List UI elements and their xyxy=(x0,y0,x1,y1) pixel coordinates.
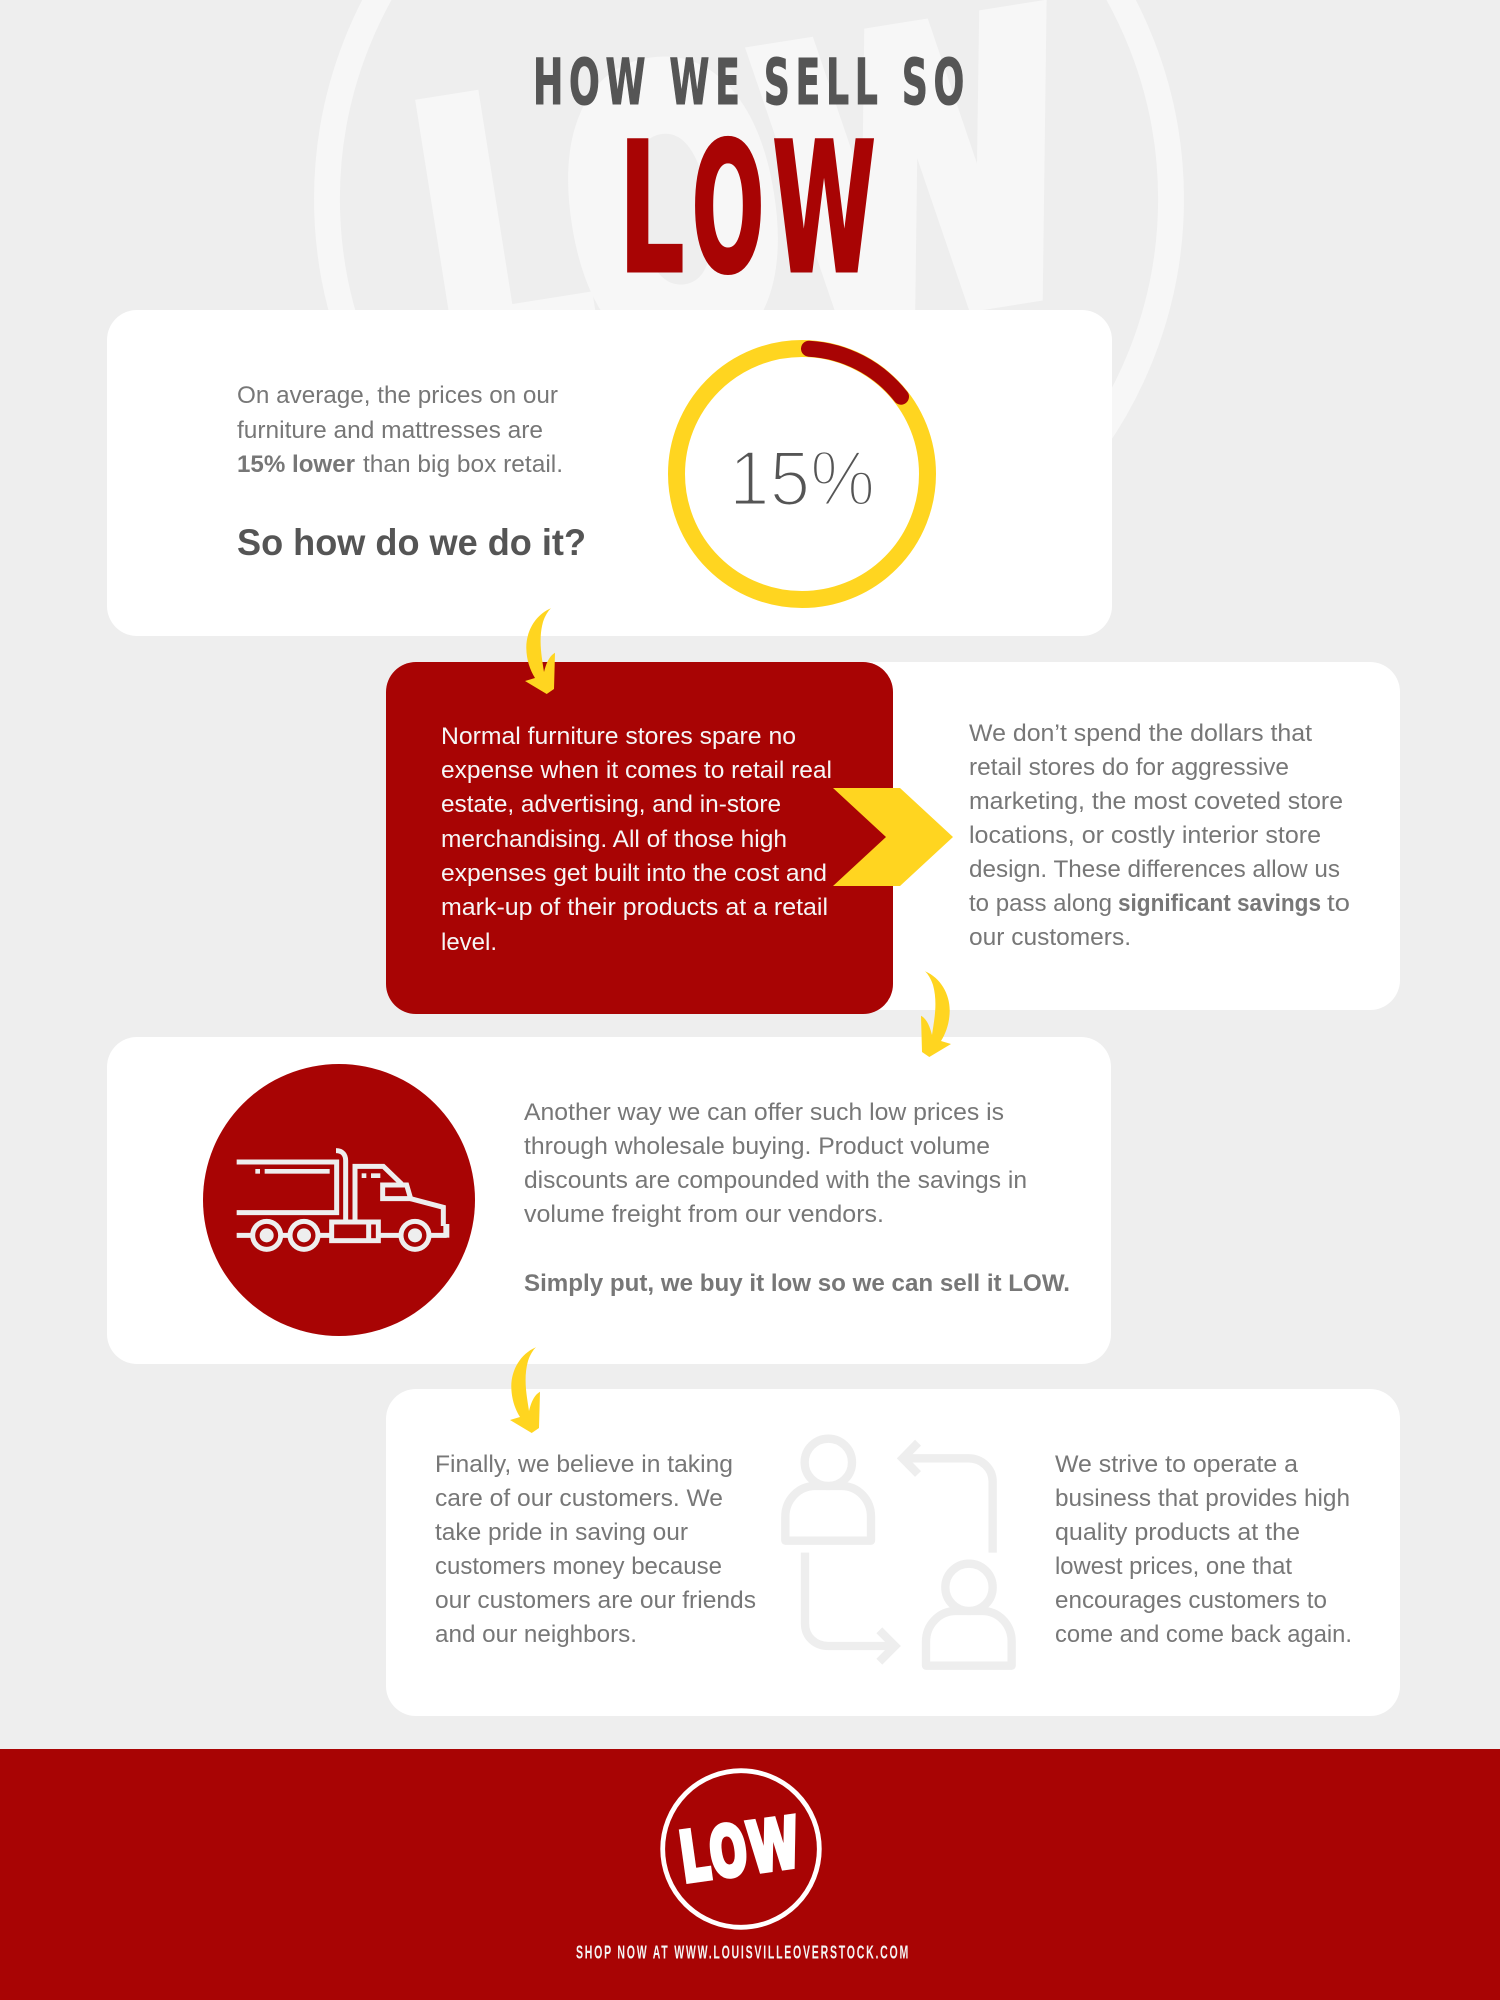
donut chart 15 percent: 15% xyxy=(729,434,875,522)
footer logo xyxy=(663,1771,819,1927)
panel: wholesale buying xyxy=(107,1037,1111,1364)
left customer text: care of our customers. We xyxy=(435,1485,723,1512)
footer logo: W xyxy=(743,1803,805,1889)
wholesale text: Another way we can offer such low prices is xyxy=(524,1099,1004,1126)
left customer text: and our neighbors. xyxy=(435,1621,637,1648)
watermark logo: L xyxy=(393,19,614,468)
wholesale text xyxy=(524,1099,1070,1297)
white card text: We don’t spend the dollars that xyxy=(969,720,1312,747)
title line: low: W xyxy=(772,105,876,314)
white card text: design. These differences allow us xyxy=(969,856,1340,883)
white card text: to pass along xyxy=(969,890,1112,917)
panel: customers xyxy=(386,1389,1400,1716)
red card text: expenses get built into the cost and xyxy=(441,860,827,887)
white card text: retail stores do for aggressive xyxy=(969,754,1289,781)
intro text: furniture and mattresses are xyxy=(237,417,543,444)
red card text: merchandising. All of those high xyxy=(441,826,787,853)
left customer text xyxy=(435,1451,756,1648)
red card text: expense when it comes to retail real xyxy=(441,757,832,784)
title line: low: L xyxy=(618,105,684,314)
intro text: 15% lower xyxy=(237,451,355,478)
footer xyxy=(0,1749,1500,2000)
intro text xyxy=(237,382,563,478)
right customer text: We strive to operate a xyxy=(1055,1451,1299,1478)
footer url: SHOP NOW AT WWW.LOUISVILLEOVERSTOCK.COM xyxy=(576,1942,910,1962)
red card xyxy=(386,662,893,1014)
left customer text: Finally, we believe in taking xyxy=(435,1451,733,1478)
red card text: level. xyxy=(441,929,497,956)
icon: truck in red circle xyxy=(203,1064,475,1336)
white card text: marketing, the most coveted store xyxy=(969,788,1343,815)
arrow: card one to red card xyxy=(525,608,555,694)
red card text: Normal furniture stores spare no xyxy=(441,723,796,750)
arrow: white card to truck card xyxy=(921,971,951,1057)
right customer text: lowest prices, one that xyxy=(1055,1553,1292,1580)
wholesale text: volume freight from our vendors. xyxy=(524,1201,884,1228)
footer logo: O xyxy=(704,1810,752,1895)
title line: low xyxy=(618,105,876,314)
left customer text: our customers are our friends xyxy=(435,1587,756,1614)
icon: people exchange xyxy=(785,1439,1012,1666)
arrow: chevron xyxy=(833,788,953,886)
intro text: On average, the prices on our xyxy=(237,382,558,409)
title line: how we sell so: HOW WE SELL SO xyxy=(533,46,970,119)
right customer text: encourages customers to xyxy=(1055,1587,1327,1614)
red card text xyxy=(441,723,832,956)
white card text: locations, or costly interior store xyxy=(969,822,1321,849)
title xyxy=(533,46,970,314)
question heading: So how do we do it? xyxy=(237,522,586,563)
right customer text xyxy=(1055,1451,1352,1648)
red card text: estate, advertising, and in-store xyxy=(441,791,781,818)
red card text: mark-up of their products at a retail xyxy=(441,894,828,921)
wholesale text: through wholesale buying. Product volume xyxy=(524,1133,990,1160)
watermark logo xyxy=(327,0,1171,621)
donut chart 15 percent xyxy=(676,348,928,600)
wholesale text: discounts are compounded with the savings in xyxy=(524,1167,1027,1194)
intro text: than big box retail. xyxy=(363,451,563,478)
title line: low: O xyxy=(692,105,764,314)
right customer text: come and come back again. xyxy=(1055,1621,1352,1648)
white card text xyxy=(969,720,1350,951)
panel: retail stores xyxy=(386,662,1400,1014)
right customer text: business that provides high xyxy=(1055,1485,1350,1512)
white card text: our customers. xyxy=(969,924,1131,951)
right customer text: quality products at the xyxy=(1055,1519,1300,1546)
panel: fifteen percent xyxy=(107,310,1112,636)
left customer text: customers money because xyxy=(435,1553,722,1580)
footer logo: L xyxy=(675,1816,715,1899)
white card text: to xyxy=(1327,890,1350,917)
left customer text: take pride in saving our xyxy=(435,1519,688,1546)
arrow: truck card to customer card xyxy=(510,1347,540,1433)
white card text: significant savings xyxy=(1118,890,1321,917)
wholesale text: Simply put, we buy it low so we can sell it LOW. xyxy=(524,1270,1070,1297)
